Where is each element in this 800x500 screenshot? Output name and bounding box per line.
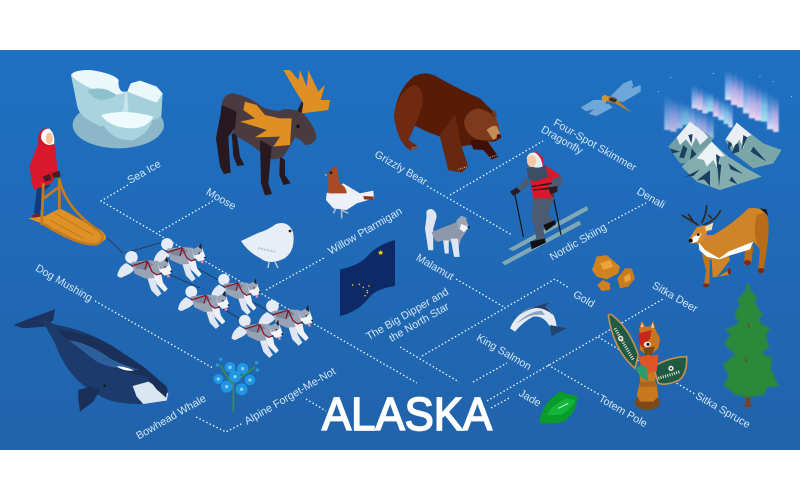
label: sea ice: Sea Ice	[125, 158, 163, 187]
icon: totem pole	[608, 314, 687, 410]
label: alpine forget-me-not: Alpine Forget-Me-Not	[243, 365, 338, 427]
label: sitka spruce: Sitka Spruce	[693, 390, 752, 431]
labels	[33, 117, 752, 442]
icon: musher with sled	[28, 128, 106, 244]
icon: king salmon	[510, 302, 567, 336]
icon: willow ptarmigan	[324, 167, 374, 218]
label: sitka deer: Sitka Deer	[650, 280, 700, 315]
icon: gold nuggets	[592, 255, 635, 291]
label: big dipper and north star: the North Star	[387, 300, 452, 345]
label: nordic skiing: Nordic Skiing	[548, 221, 609, 264]
label: moose: Moose	[204, 186, 238, 213]
label: grizzly bear: Grizzly Bear	[372, 149, 430, 189]
sled reins	[107, 238, 270, 322]
icon: alpine forget-me-not	[213, 358, 259, 412]
icon: bowhead whale	[13, 309, 168, 412]
icon: nordic skier	[502, 152, 588, 265]
icon: sitka spruce	[724, 283, 777, 407]
icon: husky team	[117, 238, 313, 358]
label: big dipper and north star: The Big Dipper and	[364, 286, 451, 343]
label: dog mushing: Dog Mushing	[33, 262, 94, 305]
label: gold: Gold	[571, 289, 597, 310]
icon: white winter ptarmigan	[241, 223, 294, 268]
icon: moose	[216, 70, 330, 195]
icon: alaska flag	[340, 240, 395, 316]
label: willow ptarmigan: Willow Ptarmigan	[326, 205, 404, 257]
blue background panel	[0, 50, 800, 450]
icon: jade	[539, 392, 577, 424]
label: denali: Denali	[634, 186, 667, 211]
label: malamut: Malamut	[414, 252, 456, 283]
icon: malamute	[425, 209, 470, 257]
label: totem pole: Totem Pole	[596, 393, 649, 430]
label: bowhead whale: Bowhead Whale	[134, 393, 208, 442]
label: dragonfly: Dragonfly	[539, 124, 585, 157]
label: king salmon: King Salmon	[474, 332, 533, 373]
icon: dragonfly	[581, 80, 641, 116]
title: ALASKA	[322, 388, 492, 440]
label: jade: Jade	[517, 387, 543, 409]
icon: sitka deer	[682, 205, 769, 287]
label: four-spot skimmer: Four-Spot Skimmer	[551, 117, 639, 174]
icon: grizzly bear	[394, 73, 501, 173]
icon: denali mountains with aurora	[658, 70, 792, 190]
dotted connector lines	[95, 141, 695, 432]
icon: sea ice	[71, 70, 164, 148]
